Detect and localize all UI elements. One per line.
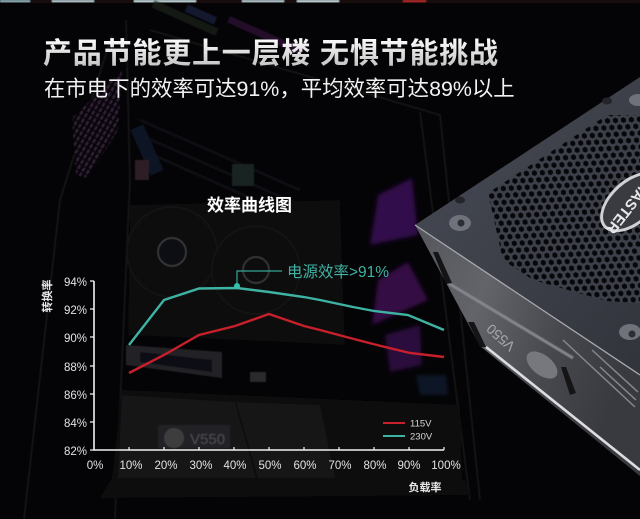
x axis labels: 100%	[431, 460, 461, 472]
vent mesh	[488, 115, 640, 303]
x axis labels: 30%	[189, 460, 213, 472]
y axis labels	[64, 277, 87, 458]
callout: 电源效率>91%	[287, 263, 389, 281]
legend: 115V	[410, 418, 432, 430]
left mesh fan panel	[72, 70, 122, 178]
PSU light edge	[415, 225, 640, 375]
x axis labels: 60%	[293, 460, 317, 472]
GPU	[128, 200, 345, 345]
x axis labels: 50%	[258, 460, 282, 472]
fan right	[212, 226, 300, 314]
y axis labels: 94%	[64, 277, 87, 289]
x axis labels: 70%	[328, 460, 352, 472]
decorative stripes	[563, 340, 638, 407]
axes	[90, 281, 444, 450]
line 230V	[129, 288, 444, 345]
case top components	[151, 0, 219, 36]
subtitle: 在市电下的效率可达91%，平均效率可达89%以上	[44, 77, 515, 101]
x axis labels	[87, 460, 461, 472]
x axis labels: 10%	[119, 460, 143, 472]
y axis title: 转换率	[40, 280, 54, 312]
side slots	[433, 252, 452, 284]
x axis labels: 40%	[223, 460, 247, 472]
fan left	[127, 207, 217, 297]
callout	[234, 263, 389, 289]
logo badge	[589, 160, 640, 244]
x axis labels: 0%	[87, 460, 103, 472]
background: dim PC case interior: V550	[190, 431, 225, 448]
y axis labels: 86%	[64, 390, 87, 402]
side label V550: V550	[483, 321, 518, 355]
y axis labels: 90%	[64, 333, 87, 345]
efficiency chart	[40, 263, 461, 494]
x axis labels: 20%	[154, 460, 178, 472]
background: dim PC case interior	[24, 0, 480, 519]
motherboard slot	[126, 345, 222, 378]
product: power supply unit	[415, 77, 640, 476]
shroud V550 plate	[158, 425, 230, 448]
PSU top face	[415, 77, 640, 375]
y axis labels: 84%	[64, 418, 87, 430]
PSU shroud	[112, 390, 462, 480]
screws	[449, 215, 471, 231]
y axis labels: 92%	[64, 305, 87, 317]
y axis labels: 82%	[64, 446, 87, 458]
x axis title: 负载率	[408, 480, 442, 494]
PSU side face	[415, 225, 640, 476]
side logo	[522, 346, 562, 384]
line 115V	[129, 314, 444, 373]
chart title: 效率曲线图	[207, 195, 292, 215]
x axis labels: 80%	[363, 460, 387, 472]
legend	[383, 418, 433, 442]
title: 产品节能更上一层楼 无惧节能挑战	[43, 37, 499, 70]
y axis labels: 88%	[64, 362, 87, 374]
top strip of previous image	[0, 0, 640, 3]
magenta RGB blobs	[370, 178, 418, 245]
x axis labels: 90%	[397, 460, 421, 472]
legend: 230V	[410, 432, 433, 442]
